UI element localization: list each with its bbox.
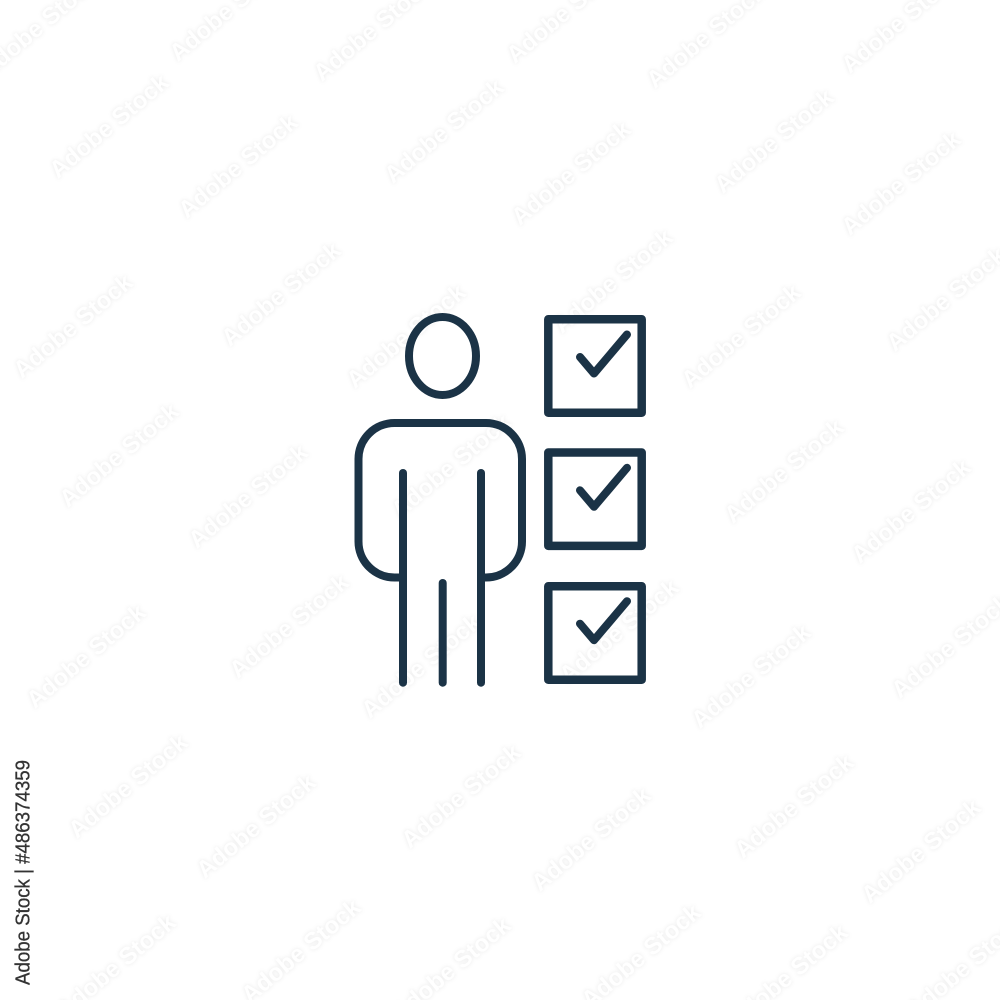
watermark pattern: Adobe Stock xyxy=(548,223,679,339)
watermark pattern: Adobe Stock xyxy=(386,408,517,524)
watermark pattern: Adobe Stock xyxy=(396,738,527,854)
watermark pattern: Adobe Stock xyxy=(846,453,977,569)
watermark pattern: Adobe Stock xyxy=(856,793,987,909)
watermark pattern: Adobe Stock xyxy=(554,573,685,689)
watermark pattern: Adobe Stock xyxy=(836,125,967,241)
watermark pattern: Adobe Stock xyxy=(709,83,840,199)
watermark pattern: Adobe Stock xyxy=(54,397,185,513)
icon: checked box 1 xyxy=(548,319,642,413)
watermark pattern: Adobe Stock xyxy=(341,278,472,394)
watermark pattern: Adobe Stock xyxy=(216,236,347,352)
watermark pattern: Adobe Stock xyxy=(356,608,487,724)
watermark pattern: Adobe Stock xyxy=(224,568,355,684)
stock image id label: Adobe Stock | #486374359 xyxy=(12,760,34,985)
watermark pattern: Adobe Stock xyxy=(44,68,175,184)
person body and arms xyxy=(358,423,522,578)
person left leg line xyxy=(399,473,407,683)
person right leg line xyxy=(477,473,485,683)
icon: person with checklist xyxy=(358,317,642,683)
watermark pattern: Adobe Stock xyxy=(506,115,637,231)
watermark pattern: Adobe Stock xyxy=(719,413,850,529)
watermark pattern: Adobe Stock xyxy=(173,108,304,224)
icon: checked box 3 xyxy=(548,586,642,680)
watermark pattern: Adobe Stock xyxy=(526,781,657,897)
watermark pattern: Adobe Stock xyxy=(191,768,322,884)
person centre leg line xyxy=(439,583,447,683)
watermark pattern: Adobe Stock xyxy=(729,748,860,864)
person head xyxy=(409,317,476,395)
watermark pattern: Adobe Stock xyxy=(63,728,194,844)
icon: person xyxy=(358,317,522,683)
watermark pattern: Adobe Stock xyxy=(183,438,314,554)
watermark pattern: Adobe Stock xyxy=(21,598,152,714)
watermark pattern: Adobe Stock xyxy=(676,278,807,394)
watermark pattern: Adobe Stock xyxy=(379,73,510,189)
watermark pattern: Adobe Stock xyxy=(686,618,817,734)
watermark pattern: Adobe Stock xyxy=(8,268,139,384)
icon: checked box 2 xyxy=(548,452,642,546)
